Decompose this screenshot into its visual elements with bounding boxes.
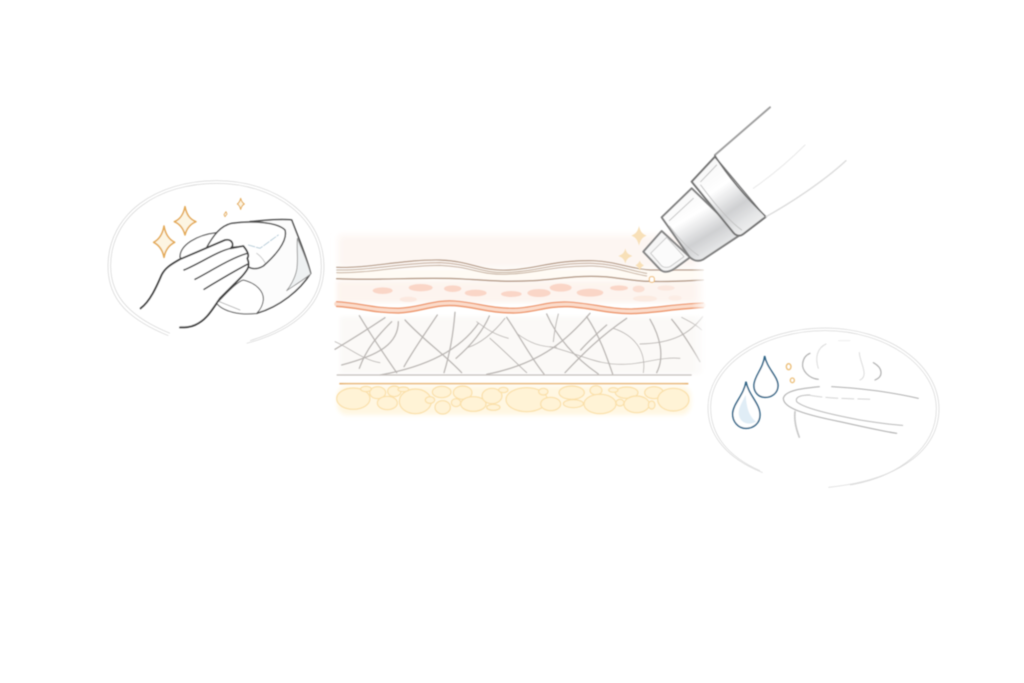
inset circle (708, 328, 939, 487)
icon: applicator pen (618, 100, 846, 272)
pore marker (649, 277, 654, 282)
steam (803, 341, 881, 380)
panel: water and steam inset (708, 328, 939, 487)
dermis lower boundary (337, 373, 692, 377)
right edge fade (692, 230, 708, 420)
water drop: small (754, 356, 778, 397)
hand (141, 240, 249, 327)
collagen fibers (335, 312, 703, 375)
bowl (783, 387, 918, 437)
epidermis surface lines (337, 260, 703, 282)
inset circle (108, 181, 324, 343)
dermis background (340, 317, 703, 374)
warm dots (786, 364, 794, 383)
barrel (715, 100, 846, 217)
collar (692, 157, 766, 236)
pigment cells (373, 284, 682, 302)
droplet highlight (739, 395, 756, 424)
sparkles near tip (618, 226, 647, 271)
panel: skin cross-section (335, 230, 708, 420)
sparkles (154, 198, 244, 257)
stratum background (337, 235, 703, 303)
cloth fold details (219, 235, 278, 310)
fat layer (337, 386, 691, 415)
finger lines (184, 248, 247, 289)
tip (643, 231, 690, 272)
cloth (180, 219, 311, 314)
subcutaneous boundary (339, 381, 688, 386)
panel: cloth wiping inset (108, 181, 324, 343)
nozzle (662, 188, 740, 261)
basement membrane (337, 301, 703, 314)
water drop: large (733, 382, 760, 428)
barrel outline (715, 107, 846, 217)
